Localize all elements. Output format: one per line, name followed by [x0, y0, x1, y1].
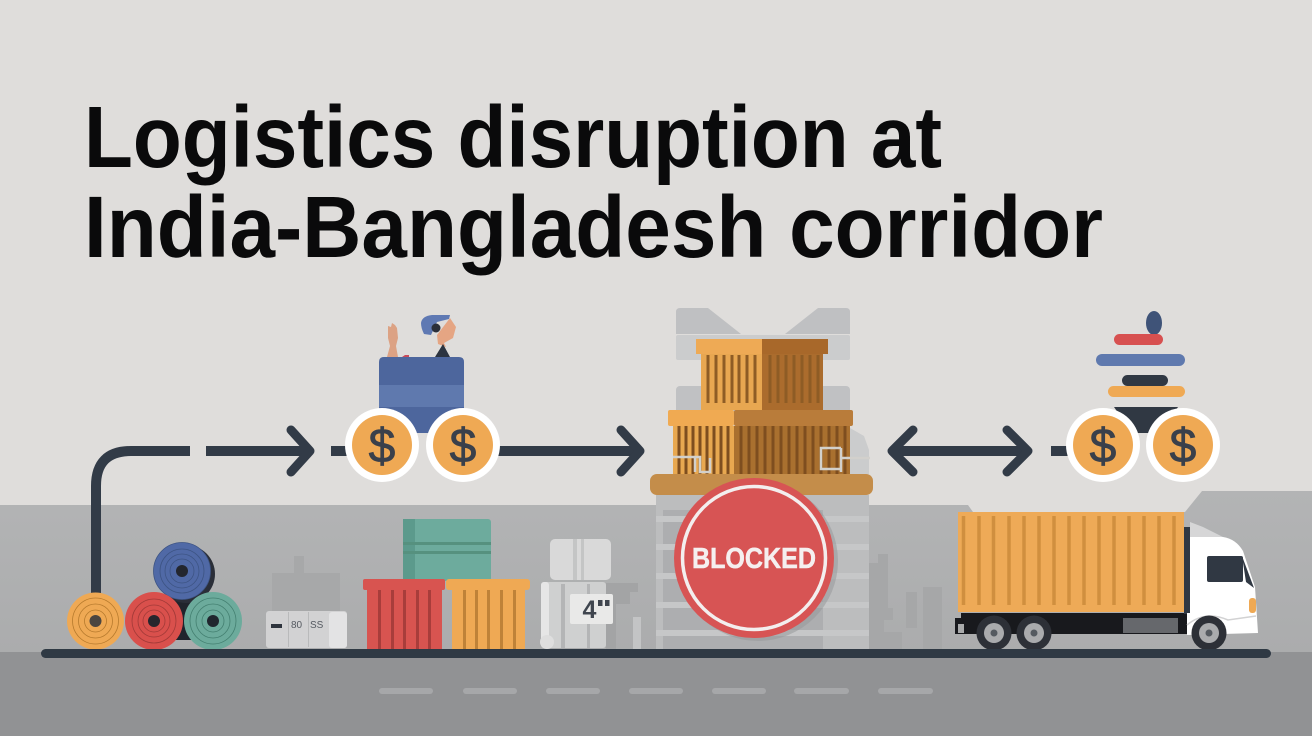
coin pair right: $	[1090, 420, 1116, 473]
"4" label: 4	[583, 596, 597, 624]
coin pair left	[345, 408, 500, 482]
first checkpoint vehicle with official	[379, 315, 464, 433]
white labelled box	[266, 611, 347, 648]
road surface	[0, 652, 1312, 736]
red crate	[363, 579, 445, 650]
blocked sign: BLOCKED	[692, 543, 816, 575]
coin pair right: $	[1170, 420, 1196, 473]
yellow roll	[67, 592, 124, 650]
distant city silhouette	[869, 554, 942, 650]
official figure	[387, 315, 456, 357]
cargo container	[958, 512, 1184, 612]
white labelled box: 80	[291, 620, 303, 631]
lower container	[668, 410, 870, 474]
green roll	[184, 592, 242, 650]
title	[84, 89, 1103, 276]
arrow: two-way between blocked cargo and second checkpoint	[892, 430, 1075, 472]
white labelled box: SS	[310, 620, 324, 631]
checkpoint tower base	[656, 495, 869, 652]
blocked cargo stack	[650, 339, 873, 495]
blocked sign	[674, 478, 838, 641]
container truck	[955, 512, 1258, 650]
grey factory silhouette behind cargo	[676, 308, 869, 474]
top container	[696, 339, 828, 410]
white goods stack with label	[540, 539, 641, 650]
blue vehicle body	[379, 357, 464, 433]
fabric rolls pile	[67, 542, 242, 650]
chassis	[955, 613, 1190, 634]
truck cab	[1187, 522, 1258, 635]
coin pair right	[1066, 408, 1220, 482]
wheels	[976, 616, 1226, 650]
road lane dashes	[379, 688, 933, 694]
background wall	[0, 0, 1312, 520]
coin pair left: $	[450, 420, 476, 473]
ground line	[41, 649, 1271, 658]
blue roll	[154, 542, 210, 600]
title: Logistics disruption at	[84, 89, 942, 186]
red roll	[125, 592, 183, 650]
arrow: first checkpoint to blocked cargo	[490, 430, 640, 472]
wooden shelf	[650, 474, 873, 495]
stacked bars icon right	[1096, 311, 1185, 433]
orange crate	[446, 579, 530, 650]
grey package behind white box	[272, 556, 340, 611]
green crate	[403, 519, 491, 581]
background ground band	[0, 491, 1312, 652]
arrow: path from rolls to first checkpoint	[96, 430, 350, 596]
coin pair left: $	[369, 420, 395, 473]
title: India-Bangladesh corridor	[84, 179, 1103, 276]
vehicle stripe	[379, 385, 464, 407]
